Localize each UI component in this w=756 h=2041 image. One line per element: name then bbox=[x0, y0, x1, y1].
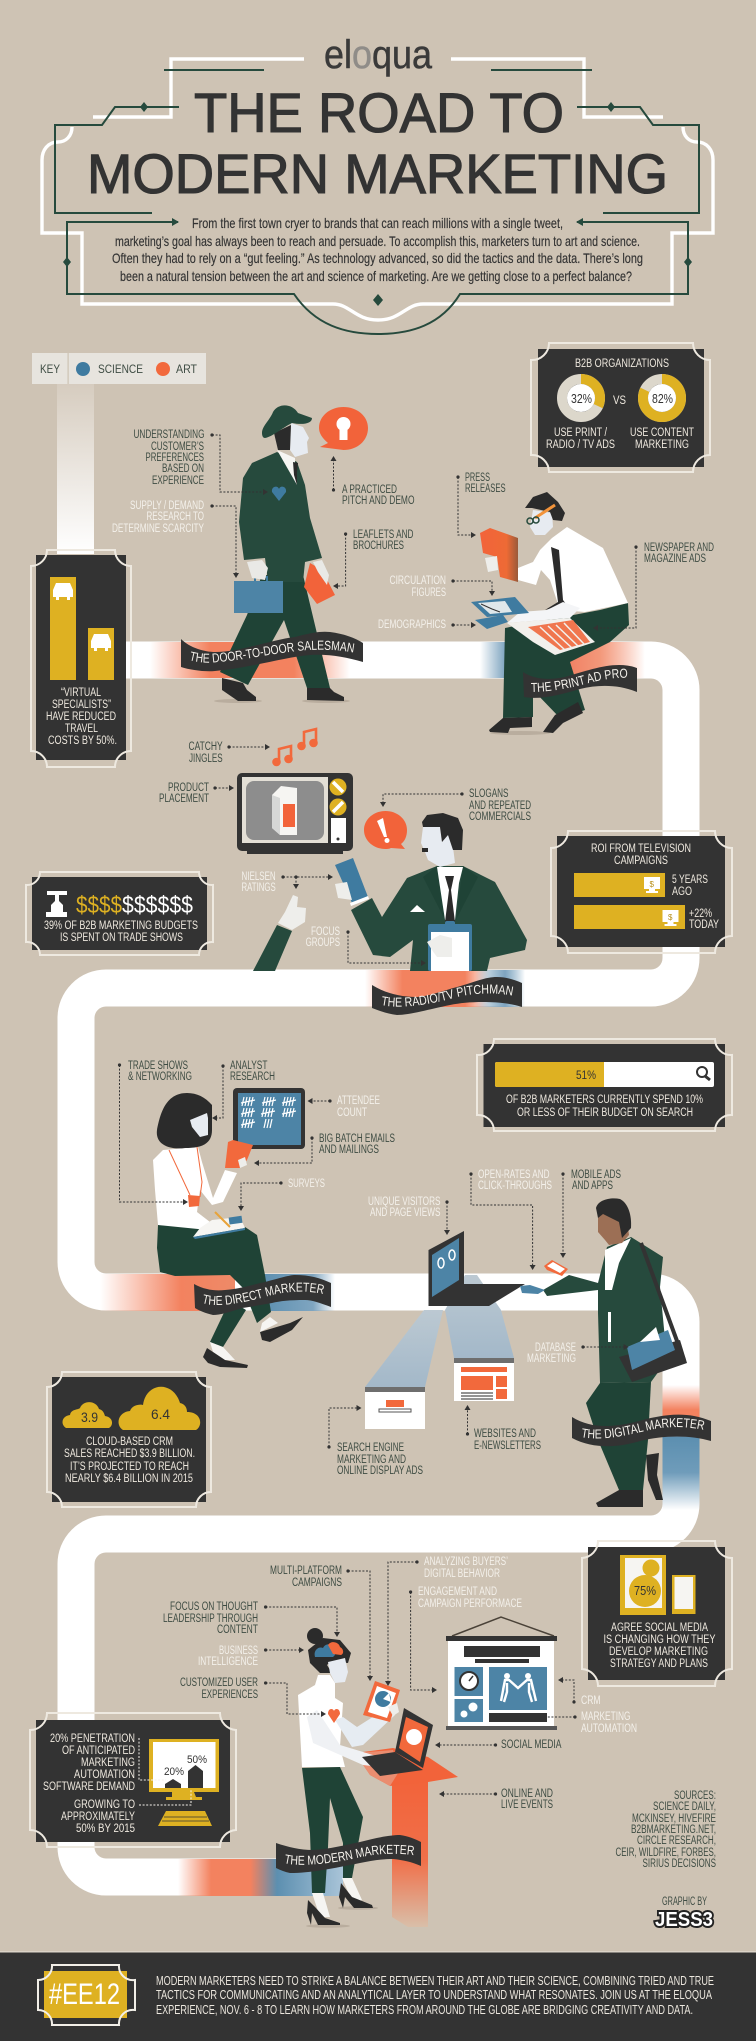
phone bbox=[544, 1260, 568, 1276]
label: engagement: ENGAGEMENT AND bbox=[418, 1586, 497, 1598]
back shoe bbox=[260, 1317, 303, 1342]
modern marketer torso bbox=[298, 1675, 345, 1767]
pitchman tie bbox=[445, 876, 455, 922]
label: marketing automation bbox=[581, 1711, 637, 1735]
print pro legs bbox=[503, 603, 629, 718]
label: circulation bbox=[390, 575, 446, 599]
panel: ROI from television: AGO bbox=[672, 886, 692, 898]
label: nielsen ratings: NIELSEN bbox=[242, 871, 276, 883]
sources: SCIENCE DAILY, bbox=[653, 1801, 716, 1813]
labels: modern marketer bbox=[163, 1556, 637, 1811]
label: search engine: ONLINE DISPLAY ADS bbox=[337, 1465, 423, 1477]
salesman head bbox=[290, 423, 309, 457]
banner: the digital marketer: THE DIGITAL MARKETER bbox=[582, 1418, 704, 1438]
panel: ROI from television bbox=[551, 831, 732, 953]
title bbox=[87, 81, 668, 205]
hair bbox=[157, 1093, 212, 1148]
icon: monitors bbox=[644, 877, 678, 926]
banner: the direct marketer: THE DIRECT MARKETER bbox=[204, 1282, 324, 1305]
panel: trade show budgets: $$$$ bbox=[76, 892, 122, 919]
panel: search budget bbox=[477, 1039, 732, 1131]
icon: computer with bars: 20% bbox=[164, 1766, 184, 1778]
label: open rates: CLICK-THROUGHS bbox=[478, 1180, 552, 1192]
character: digital marketer bbox=[520, 1198, 687, 1507]
gears tile bbox=[454, 1699, 483, 1722]
graphic credit: JESS3 bbox=[655, 1909, 713, 1931]
labels: digital marketer bbox=[337, 1169, 621, 1477]
print pro head bbox=[530, 510, 553, 535]
icon: computer with bars bbox=[149, 1739, 219, 1826]
label: slogans bbox=[469, 788, 531, 823]
title: THE ROAD TO bbox=[194, 81, 564, 144]
label: websites: WEBSITES AND bbox=[474, 1428, 536, 1440]
banner: the door-to-door salesman bbox=[181, 632, 363, 672]
label: unique visitors: UNIQUE VISITORS bbox=[368, 1196, 441, 1208]
panel: cloud CRM sales: IT’S PROJECTED TO REACH bbox=[70, 1461, 189, 1473]
thumbs up arm bbox=[253, 895, 306, 971]
label: marketing automation: MARKETING bbox=[581, 1711, 631, 1723]
banner: the modern marketer bbox=[276, 1835, 421, 1873]
panel: ROI from television: CAMPAIGNS bbox=[614, 855, 668, 867]
labels: direct marketer bbox=[128, 1060, 395, 1190]
intro text: From the first town cryer to brands that can reach millions with a single tweet, bbox=[192, 215, 563, 231]
label: understanding customers bbox=[134, 429, 205, 487]
digital marketer legs bbox=[586, 1382, 651, 1490]
presentation board bbox=[446, 1617, 557, 1730]
logo: eloqua: eloqua bbox=[324, 33, 433, 77]
label: trade shows: & NETWORKING bbox=[128, 1071, 192, 1083]
label: demographics: DEMOGRAPHICS bbox=[378, 619, 446, 631]
label: online and live events: LIVE EVENTS bbox=[501, 1799, 553, 1811]
icon: music notes bbox=[274, 729, 316, 765]
icon: monitors: $ bbox=[650, 880, 654, 889]
digital marketer shoe bbox=[596, 1490, 643, 1507]
banner: the print ad pro: THE PRINT AD PRO bbox=[531, 668, 628, 692]
icon: orange heart bbox=[328, 1709, 340, 1723]
face bbox=[190, 1113, 208, 1137]
panel: cloud CRM sales bbox=[47, 1372, 211, 1507]
footer bbox=[0, 1951, 756, 2041]
milk carton bbox=[272, 786, 297, 835]
label: analyst research bbox=[230, 1060, 275, 1083]
label: CRM: CRM bbox=[581, 1695, 601, 1707]
banner: the direct marketer bbox=[194, 1275, 331, 1315]
badge: #EE12 bbox=[38, 1965, 135, 2025]
back heel bbox=[646, 1453, 663, 1500]
label: mobile ads: MOBILE ADS bbox=[571, 1169, 621, 1181]
label: customized experiences bbox=[180, 1677, 258, 1701]
pitchman head bbox=[421, 827, 455, 867]
icon: clouds bbox=[63, 1387, 200, 1430]
label: analyst research: RESEARCH bbox=[230, 1071, 275, 1083]
label: understanding customers: PREFERENCES bbox=[146, 452, 204, 464]
panel: social media: AGREE SOCIAL MEDIA bbox=[611, 1622, 708, 1634]
road bbox=[57, 384, 700, 1896]
character: print ad pro bbox=[471, 492, 629, 735]
label: database marketing: DATABASE bbox=[535, 1342, 576, 1354]
gauge tile bbox=[454, 1667, 483, 1696]
label: nielsen ratings bbox=[242, 871, 276, 894]
salesman shirt and tie bbox=[277, 450, 297, 485]
sources: MCKINSEY, HIVEFIRE bbox=[632, 1813, 716, 1825]
badge: #EE12: #EE12 bbox=[49, 1978, 120, 2011]
sources: SOURCES: bbox=[674, 1790, 716, 1802]
label: multi-platform bbox=[270, 1565, 342, 1589]
character: radio/tv pitchman bbox=[253, 813, 527, 971]
icon: exclamation bubble bbox=[364, 811, 407, 849]
label: business intelligence: BUSINESS bbox=[219, 1645, 258, 1657]
salesman jacket bbox=[239, 452, 322, 582]
print pro hair bbox=[525, 492, 565, 521]
label: nielsen ratings: RATINGS bbox=[242, 882, 276, 894]
tablet with pie chart bbox=[363, 1681, 400, 1722]
leaflet bbox=[225, 1140, 253, 1168]
panel: search budget: 51% bbox=[576, 1068, 596, 1082]
tablet with tally marks bbox=[233, 1088, 305, 1149]
pitchman shirt bbox=[437, 867, 463, 920]
direct marketer trousers bbox=[157, 1225, 271, 1323]
connectors bbox=[120, 435, 636, 1794]
modern marketer heels bbox=[307, 1883, 373, 1925]
label: circulation: FIGURES bbox=[412, 587, 446, 599]
label: unique visitors: AND PAGE VIEWS bbox=[370, 1207, 441, 1219]
labels: print ad pro bbox=[378, 472, 714, 631]
modern marketer socks bbox=[312, 1878, 362, 1917]
label: big batch emails bbox=[319, 1133, 395, 1156]
panel: virtual specialists: COSTS BY 50%. bbox=[48, 735, 117, 747]
label: leaflets: LEAFLETS AND bbox=[353, 529, 414, 541]
banner: the radio/tv pitchman: THE RADIO/TV PITCHMAN bbox=[382, 984, 514, 1007]
print pro tie bbox=[545, 547, 566, 610]
front shoe bbox=[203, 1348, 248, 1368]
label: press releases: PRESS bbox=[465, 472, 490, 484]
panel: trade show budgets: $$$$$$ bbox=[122, 892, 193, 919]
label: newspaper: MAGAZINE ADS bbox=[644, 553, 706, 565]
label: practiced pitch bbox=[342, 484, 415, 507]
label: websites: E-NEWSLETTERS bbox=[474, 1440, 541, 1452]
salesman legs bbox=[220, 575, 330, 688]
panel: B2B organizations: VS bbox=[613, 395, 626, 407]
brochure bbox=[304, 560, 335, 604]
panel: social media bbox=[582, 1541, 732, 1686]
panel: virtual specialists: SPECIALISTS” bbox=[52, 699, 111, 711]
pitchman jacket bbox=[351, 866, 527, 971]
label: newspaper bbox=[644, 542, 714, 565]
labels: salesman bbox=[112, 429, 415, 552]
icon: tablet and phone bbox=[620, 1555, 696, 1615]
panel: social media: DEVELOP MARKETING bbox=[609, 1646, 708, 1658]
messenger bag bbox=[619, 1243, 687, 1382]
label: practiced pitch: PITCH AND DEMO bbox=[342, 495, 415, 507]
label: analyzing buyers: DIGITAL BEHAVIOR bbox=[424, 1568, 500, 1580]
panel: B2B organizations: B2B ORGANIZATIONS bbox=[575, 358, 669, 370]
header frame ornament bbox=[42, 59, 713, 334]
label: circulation: CIRCULATION bbox=[390, 575, 446, 587]
panel: virtual specialists: “VIRTUAL bbox=[61, 687, 101, 699]
label: press releases bbox=[465, 472, 506, 495]
label: understanding customers: UNDERSTANDING bbox=[134, 429, 205, 441]
sources: SIRIUS DECISIONS bbox=[642, 1858, 716, 1870]
label: analyzing buyers: ANALYZING BUYERS’ bbox=[424, 1556, 508, 1568]
icon: blue heart bbox=[272, 487, 286, 501]
footer text bbox=[156, 1974, 714, 2017]
label: customized experiences: EXPERIENCES bbox=[202, 1689, 258, 1701]
label: thought leadership bbox=[163, 1601, 258, 1636]
panel: trade show budgets: 39% OF B2B MARKETING BUDGETS bbox=[44, 920, 198, 932]
character: door-to-door salesman bbox=[214, 405, 368, 703]
key: KEY bbox=[40, 364, 60, 376]
digital marketer shirt bbox=[605, 1238, 631, 1290]
sources: CIRCLE RESEARCH, bbox=[637, 1835, 716, 1847]
salesman shoes bbox=[222, 678, 344, 701]
label: online and live events: ONLINE AND bbox=[501, 1788, 553, 1800]
panel: B2B organizations: RADIO / TV ADS bbox=[546, 439, 615, 451]
label: attendee count bbox=[337, 1095, 380, 1119]
banner: the modern marketer: THE MODERN MARKETER bbox=[286, 1844, 414, 1865]
digital marketer head bbox=[598, 1205, 629, 1245]
character: modern marketer bbox=[298, 1628, 433, 1928]
label: focus groups bbox=[306, 926, 340, 949]
modern marketer face bbox=[328, 1658, 348, 1683]
panel: B2B organizations: MARKETING bbox=[635, 439, 689, 451]
clipboard and pencil bbox=[193, 1217, 245, 1237]
orange leaflet bbox=[480, 528, 518, 582]
intro text bbox=[112, 215, 643, 284]
key: SCIENCE bbox=[98, 364, 143, 376]
label: trade shows: TRADE SHOWS bbox=[128, 1060, 188, 1072]
label: engagement: CAMPAIGN PERFORMACE bbox=[418, 1598, 522, 1610]
salesman hair bbox=[274, 425, 291, 450]
label: practiced pitch: A PRACTICED bbox=[342, 484, 397, 496]
label: multi-platform: CAMPAIGNS bbox=[292, 1577, 342, 1589]
newspaper bbox=[507, 618, 595, 655]
panel: search budget: OF B2B MARKETERS CURRENTLY SPEND 10% bbox=[506, 1094, 703, 1106]
arm to keyboard bbox=[307, 1710, 388, 1767]
panel: marketing automation: SOFTWARE DEMAND bbox=[43, 1781, 135, 1793]
key: ART bbox=[176, 364, 197, 376]
label: websites bbox=[474, 1428, 541, 1452]
pocket square bbox=[410, 905, 425, 912]
panel: B2B organizations: 82% bbox=[652, 391, 673, 406]
label: mobile ads: AND APPS bbox=[572, 1180, 613, 1192]
icon: monitors: $ bbox=[668, 913, 673, 922]
label: supply demand: DETERMINE SCARCITY bbox=[112, 523, 204, 535]
panel: virtual specialists: HAVE REDUCED bbox=[46, 711, 116, 723]
panel: virtual specialists: TRAVEL bbox=[65, 723, 98, 735]
panel: trade show budgets bbox=[26, 872, 213, 955]
graphic credit: GRAPHIC BY bbox=[662, 1896, 707, 1908]
panel: marketing automation: OF ANTICIPATED bbox=[62, 1745, 135, 1757]
panel: marketing automation: APPROXIMATELY bbox=[61, 1811, 135, 1823]
banner: the radio/tv pitchman bbox=[372, 977, 522, 1015]
print pro forearm bbox=[507, 602, 580, 623]
laptop bbox=[428, 1231, 525, 1306]
label: product placement: PRODUCT bbox=[168, 782, 209, 794]
panel: ROI from television: TODAY bbox=[689, 919, 719, 931]
labels: radio/tv pitchman bbox=[159, 741, 531, 949]
icon: magnifier bbox=[697, 1067, 710, 1080]
label: press releases: RELEASES bbox=[465, 483, 506, 495]
label: trade shows bbox=[128, 1060, 192, 1083]
panel: B2B organizations bbox=[531, 343, 710, 472]
panel: B2B organizations: 32% bbox=[571, 391, 592, 406]
label: big batch emails: BIG BATCH EMAILS bbox=[319, 1133, 395, 1145]
icon: computer with bars: 50% bbox=[187, 1754, 207, 1766]
remote control bbox=[335, 858, 369, 906]
panel: search budget: OR LESS OF THEIR BUDGET ON SEARCH bbox=[517, 1107, 693, 1119]
label: mobile ads bbox=[571, 1169, 621, 1192]
label: newspaper: NEWSPAPER AND bbox=[644, 542, 714, 554]
lanyard bbox=[169, 1147, 202, 1197]
chart pad bbox=[471, 597, 529, 629]
label: marketing automation: AUTOMATION bbox=[581, 1723, 637, 1735]
panel: marketing automation: AUTOMATION bbox=[74, 1769, 135, 1781]
label: attendee count: ATTENDEE bbox=[337, 1095, 380, 1107]
panel: social media: 75% bbox=[634, 1583, 656, 1598]
front leg bbox=[210, 1300, 246, 1347]
label: slogans: COMMERCIALS bbox=[469, 811, 531, 823]
label: business intelligence: INTELLIGENCE bbox=[198, 1656, 258, 1668]
panel: B2B organizations: USE PRINT / bbox=[554, 427, 608, 439]
label: focus groups: GROUPS bbox=[306, 937, 340, 949]
panel: cloud CRM sales: 6.4 bbox=[151, 1406, 170, 1422]
label: supply demand: RESEARCH TO bbox=[146, 511, 204, 523]
sources bbox=[616, 1790, 716, 1870]
label: thought leadership: CONTENT bbox=[217, 1624, 258, 1636]
label: understanding customers: EXPERIENCE bbox=[152, 475, 204, 487]
label: catchy jingles: JINGLES bbox=[189, 753, 223, 765]
label: product placement: PLACEMENT bbox=[159, 793, 209, 805]
panel: social media: STRATEGY AND PLANS bbox=[610, 1658, 708, 1670]
panel: cloud CRM sales: NEARLY $6.4 BILLION IN 2015 bbox=[65, 1473, 193, 1485]
label: open rates: OPEN-RATES AND bbox=[478, 1169, 550, 1181]
web page: websites and newsletters bbox=[454, 1358, 514, 1401]
modern marketer hair bbox=[308, 1638, 351, 1673]
handshake tile bbox=[489, 1667, 547, 1710]
label: thought leadership: LEADERSHIP THROUGH bbox=[163, 1613, 258, 1625]
panel: marketing automation: GROWING TO bbox=[74, 1799, 135, 1811]
label: understanding customers: CUSTOMER’S bbox=[151, 441, 204, 453]
title: MODERN MARKETING bbox=[87, 142, 668, 205]
label: business intelligence bbox=[198, 1645, 258, 1668]
icon: podium bbox=[46, 891, 67, 917]
panel: trade show budgets: IS SPENT ON TRADE SHOWS bbox=[60, 932, 183, 944]
label: understanding customers: BASED ON bbox=[162, 463, 204, 475]
icon: lightbulb bubble bbox=[319, 407, 368, 450]
label: customized experiences: CUSTOMIZED USER bbox=[180, 1677, 258, 1689]
television bbox=[237, 773, 353, 854]
label: focus groups: FOCUS bbox=[311, 926, 340, 938]
digital marketer jacket bbox=[543, 1237, 667, 1383]
key bbox=[32, 353, 206, 384]
panel: cloud CRM sales: 3.9 bbox=[81, 1409, 98, 1425]
label: catchy jingles: CATCHY bbox=[188, 741, 223, 753]
label: database marketing: MARKETING bbox=[527, 1353, 576, 1365]
panel: ROI from television: ROI FROM TELEVISION bbox=[591, 843, 691, 855]
label: open rates bbox=[478, 1169, 552, 1192]
label: database marketing bbox=[527, 1342, 576, 1365]
panel: virtual specialists bbox=[31, 550, 131, 767]
torso bbox=[153, 1147, 237, 1230]
panel: marketing automation bbox=[30, 1713, 236, 1847]
banner: the door-to-door salesman: THE DOOR-TO-DOOR SALESMAN bbox=[191, 640, 354, 663]
panel: cloud CRM sales: CLOUD-BASED CRM bbox=[86, 1436, 173, 1448]
label: unique visitors bbox=[368, 1196, 441, 1219]
panel: ROI from television: +22% bbox=[689, 908, 712, 920]
panel: ROI from television: 5 YEARS bbox=[672, 874, 708, 886]
label: supply demand: SUPPLY / DEMAND bbox=[130, 500, 204, 512]
projection beams bbox=[365, 1275, 514, 1387]
label: thought leadership: FOCUS ON THOUGHT bbox=[170, 1601, 258, 1613]
label: analyzing buyers bbox=[424, 1556, 508, 1580]
modern marketer trousers bbox=[302, 1767, 363, 1893]
panel: marketing automation: 20% PENETRATION bbox=[50, 1733, 135, 1745]
arm to tablet bbox=[335, 1708, 395, 1747]
panel: B2B organizations: USE CONTENT bbox=[630, 427, 694, 439]
clipboard bbox=[427, 921, 472, 971]
print pro shirt bbox=[518, 527, 628, 612]
label: search engine bbox=[337, 1442, 423, 1477]
label: supply demand bbox=[112, 500, 204, 535]
panel: marketing automation: MARKETING bbox=[81, 1757, 135, 1769]
character: direct marketer bbox=[153, 1093, 303, 1368]
label: search engine: MARKETING AND bbox=[337, 1454, 406, 1466]
laptop bbox=[362, 1708, 433, 1776]
pitchman hair bbox=[422, 813, 463, 852]
label: online and live events bbox=[501, 1788, 553, 1811]
label: multi-platform: MULTI-PLATFORM bbox=[270, 1565, 342, 1577]
label: engagement bbox=[418, 1586, 522, 1610]
salesman hat bbox=[262, 405, 312, 438]
icon: brain cloud bbox=[315, 1642, 343, 1657]
web page: search engine marketing bbox=[365, 1387, 425, 1429]
label: social media: SOCIAL MEDIA bbox=[501, 1739, 562, 1751]
label: slogans: AND REPEATED bbox=[469, 800, 531, 812]
label: analyst research: ANALYST bbox=[230, 1060, 268, 1072]
pitchman lapels bbox=[423, 866, 478, 920]
label: product placement bbox=[159, 782, 209, 805]
print pro shoes bbox=[489, 702, 583, 733]
panel: cloud CRM sales: SALES REACHED $3.9 BILLION. bbox=[64, 1448, 195, 1460]
label: leaflets bbox=[353, 529, 414, 552]
panel: social media: IS CHANGING HOW THEY bbox=[604, 1634, 716, 1646]
label: surveys: SURVEYS bbox=[288, 1178, 325, 1190]
label: catchy jingles bbox=[188, 741, 223, 765]
briefcase bbox=[234, 560, 283, 613]
label: search engine: SEARCH ENGINE bbox=[337, 1442, 404, 1454]
podium bbox=[355, 1748, 458, 1927]
label: leaflets: BROCHURES bbox=[353, 540, 404, 552]
label: big batch emails: AND MAILINGS bbox=[319, 1144, 379, 1156]
sources: B2BMARKETING.NET, bbox=[631, 1824, 716, 1836]
label: slogans: SLOGANS bbox=[469, 788, 509, 800]
panel: marketing automation: 50% BY 2015 bbox=[76, 1823, 135, 1835]
label: attendee count: COUNT bbox=[337, 1107, 367, 1119]
graphic credit bbox=[655, 1896, 713, 1931]
